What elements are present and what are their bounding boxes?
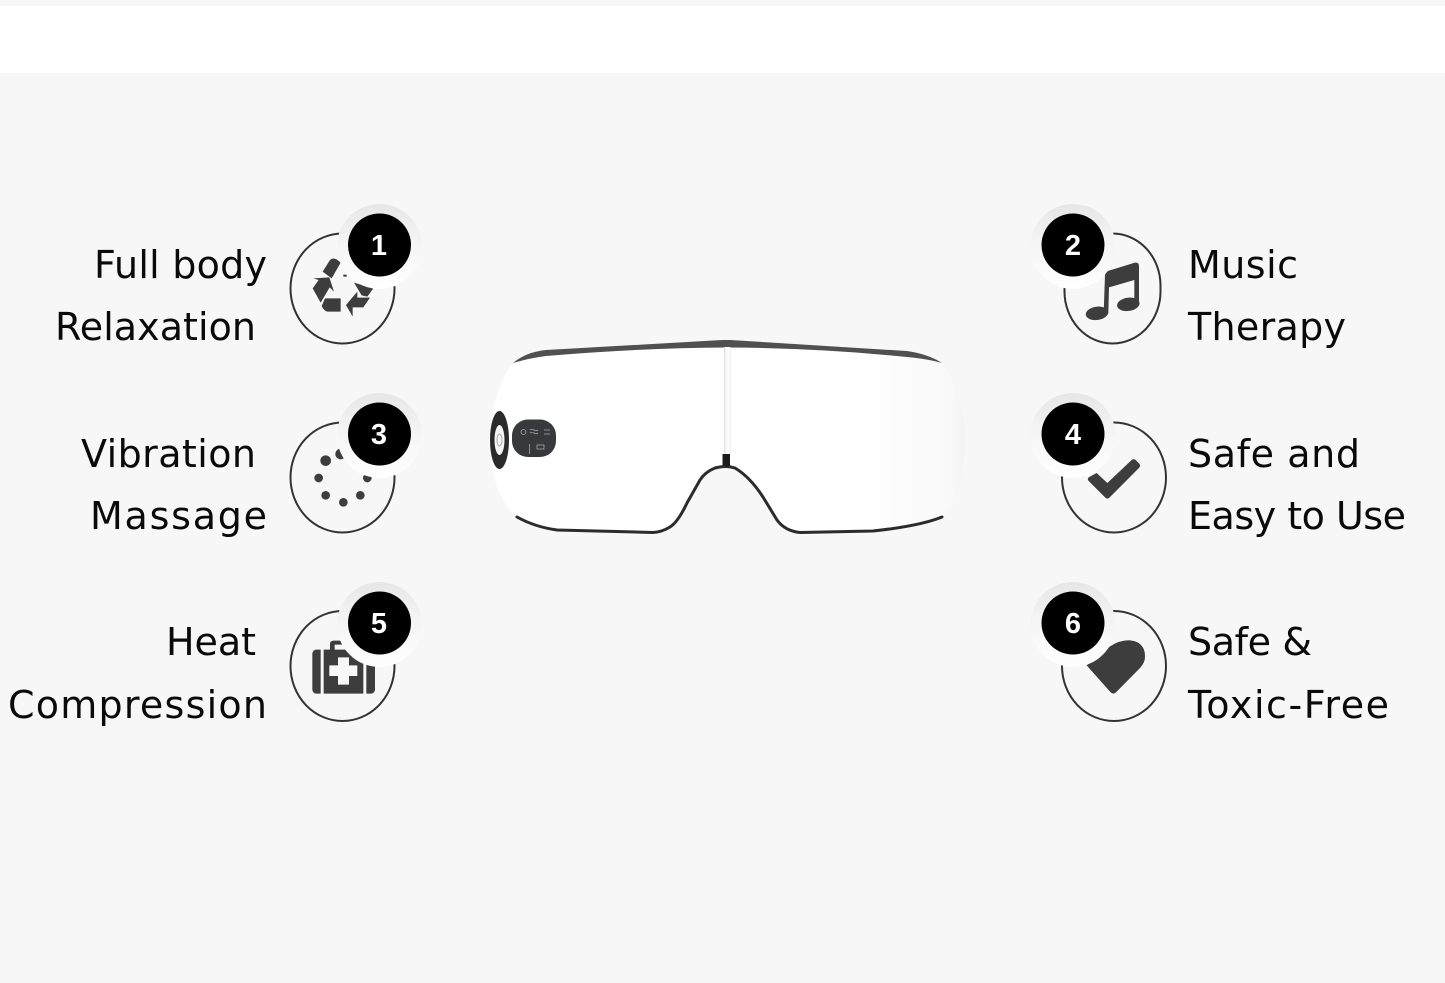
feature 3: Vibration Massage: [81, 393, 422, 538]
label: Full body Relaxation: Full body: [94, 243, 267, 287]
label: Vibration Massage: Vibration: [81, 432, 256, 476]
number badge 5: 5: [371, 608, 387, 640]
label: Heat Compression: Compression: [8, 683, 267, 727]
number badge 6: 6: [1065, 608, 1081, 640]
top strap band: [513, 340, 942, 363]
number badge 6: [1030, 582, 1116, 667]
feature 4: Safe and Easy to Use: [1030, 393, 1406, 538]
number badge 5: [337, 582, 422, 667]
number badge 1: [337, 204, 422, 289]
label: Safe and Easy to Use: Easy to Use: [1188, 494, 1406, 538]
feature 5: Heat Compression: [8, 582, 422, 727]
feature 1: Full body Relaxation: [55, 204, 422, 349]
label: Music Therapy: Music: [1188, 243, 1298, 287]
number badge 3: [337, 393, 422, 478]
icon: heart in ring: [1062, 611, 1166, 721]
label: Music Therapy: Therapy: [1187, 305, 1346, 349]
label: Vibration Massage: Massage: [90, 494, 267, 538]
power button: [490, 411, 509, 469]
icon: first aid case in ring: [290, 611, 394, 721]
icon: music note in ring: [1064, 234, 1160, 344]
label: Safe & Toxic-Free: Toxic-Free: [1187, 683, 1389, 727]
label: Safe and Easy to Use: [1188, 432, 1406, 538]
lower trim: [517, 466, 942, 532]
label: Full body Relaxation: Relaxation: [55, 305, 256, 349]
feature 6: Safe & Toxic-Free: [1030, 582, 1389, 727]
number badge 2: [1030, 204, 1116, 289]
label: Vibration Massage: [81, 432, 267, 538]
number badge 3: 3: [371, 419, 387, 451]
icon: dot circle in ring: [290, 422, 394, 532]
label: Safe & Toxic-Free: Safe &: [1188, 620, 1312, 664]
top white band: [0, 6, 1445, 73]
white shell: [491, 348, 964, 532]
label: Full body Relaxation: [55, 243, 267, 349]
label: Music Therapy: [1187, 243, 1346, 349]
label: Heat Compression: [8, 620, 267, 727]
icon: recycle arrows in ring: [290, 234, 394, 344]
number badge 2: 2: [1065, 230, 1081, 262]
feature 2: Music Therapy: [1030, 204, 1346, 349]
number badge 4: [1030, 393, 1116, 478]
center seam: [724, 347, 730, 454]
number badge 1: 1: [371, 230, 387, 262]
product: eye massager: [490, 340, 964, 532]
number badge 4: 4: [1065, 419, 1081, 451]
label: Heat Compression: Heat: [166, 620, 256, 664]
label: Safe & Toxic-Free: [1187, 620, 1389, 727]
label: Safe and Easy to Use: Safe and: [1188, 432, 1360, 476]
icon: check mark in ring: [1062, 422, 1166, 532]
control panel: [512, 420, 556, 457]
